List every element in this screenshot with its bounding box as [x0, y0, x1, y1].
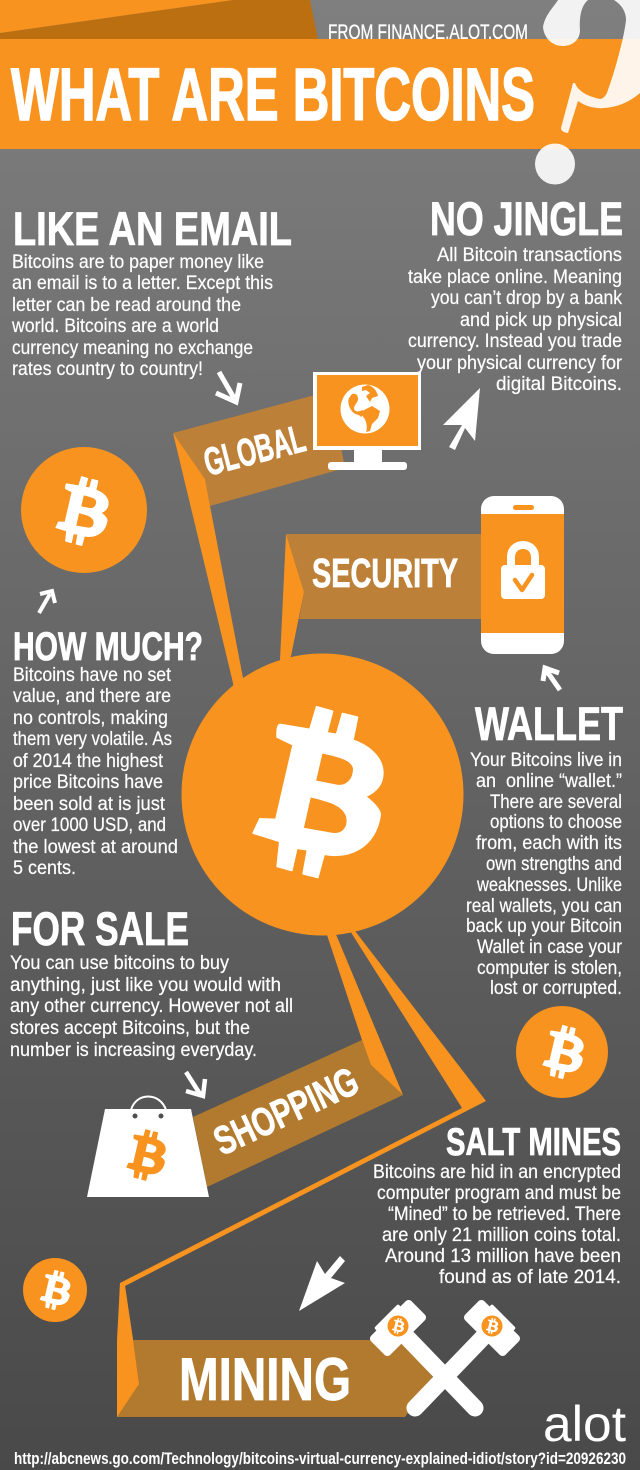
text: how much: price Bitcoins have	[13, 771, 163, 793]
title band	[0, 39, 640, 149]
text: how much: of 2014 the highest	[13, 750, 164, 772]
text: for sale: You can use bitcoins to buy	[10, 952, 229, 974]
text: salt mines: Around 13 million have been	[385, 1245, 621, 1267]
ribbon: shopping and mining connector	[117, 915, 486, 1417]
icon: padlock	[501, 545, 545, 599]
label: shopping: SHOPPING	[207, 1059, 365, 1164]
text: no jingle: you can’t drop by a bank	[431, 287, 622, 309]
text: for sale: any other currency. However not all	[10, 995, 293, 1017]
text: no jingle: currency. Instead you trade	[408, 330, 622, 352]
text: no jingle: take place online. Meaning	[408, 266, 622, 288]
source label: FROM FINANCE.ALOT.COM	[328, 21, 528, 44]
logo: alot: alot	[543, 1396, 626, 1452]
icon: question mark	[535, 0, 640, 184]
panel: no jingle	[408, 192, 623, 395]
text: no jingle: All Bitcoin transactions	[437, 244, 622, 266]
text: salt mines: found as of late 2014.	[439, 1266, 621, 1288]
text: how much: over 1000 USD, and	[13, 814, 166, 836]
label: security: SECURITY	[312, 550, 458, 596]
text: for sale: stores accept Bitcoins, but the	[10, 1017, 250, 1039]
panel: like an email	[11, 202, 292, 380]
text: no jingle: and pick up physical	[460, 309, 622, 331]
icon: phone	[481, 496, 564, 654]
text: wallet: computer is stolen,	[477, 957, 622, 979]
text: how much: the lowest at around	[13, 836, 178, 858]
text: salt mines: Bitcoins are hid in an encrypted	[373, 1161, 621, 1183]
text: like an email: letter can be read around the	[12, 294, 241, 316]
text: how much: Bitcoins have no set	[13, 664, 172, 686]
text: how much	[13, 664, 178, 879]
text: wallet: Wallet in case your	[477, 936, 622, 958]
text: wallet: an online “wallet.”	[476, 770, 622, 792]
heading: for sale: FOR SALE	[11, 902, 189, 955]
text: wallet: lost or corrupted.	[490, 977, 622, 999]
text: wallet: real wallets, you can	[466, 895, 622, 917]
arrow: to phone	[543, 668, 560, 690]
text: wallet: from, each with its	[476, 832, 622, 854]
text: wallet: There are several	[490, 791, 622, 813]
text: for sale: anything, just like you would with	[10, 974, 281, 996]
icon: shopping bag	[87, 1096, 209, 1197]
label: global: GLOBAL	[199, 417, 310, 485]
text: like an email: rates country to country!	[12, 358, 203, 380]
heading: like an email: LIKE AN EMAIL	[13, 202, 292, 255]
text: like an email: an email is to a letter. Except this	[12, 272, 273, 294]
text: wallet: Your Bitcoins live in	[470, 749, 622, 771]
arrow: to global	[216, 372, 240, 402]
text: salt mines	[373, 1161, 621, 1288]
text: no jingle: digital Bitcoins.	[496, 373, 622, 395]
text: no jingle	[408, 244, 622, 395]
text: wallet	[466, 749, 622, 999]
header top shapes	[0, 0, 318, 40]
text: wallet: back up your Bitcoin	[466, 915, 622, 937]
icon: bitcoin coin left	[21, 447, 147, 573]
text: like an email	[11, 251, 273, 380]
ribbon: mining	[117, 1283, 433, 1417]
arrow: to mining	[299, 1256, 345, 1311]
text: salt mines: “Mined” to be retrieved. There	[388, 1203, 621, 1225]
main bitcoin coin	[182, 654, 464, 936]
text: wallet: options to choose	[490, 811, 622, 833]
text: for sale	[10, 952, 293, 1061]
panel: for sale	[10, 902, 293, 1061]
text: how much: value, and there are	[13, 685, 171, 707]
ribbon: global	[173, 391, 345, 700]
ribbon: shopping	[193, 920, 403, 1187]
text: like an email: currency meaning no exchange	[12, 337, 253, 359]
text: salt mines: are only 21 million coins total.	[382, 1224, 621, 1246]
icon: bitcoin coin bottom left	[23, 1258, 87, 1322]
icon: monitor	[313, 372, 421, 470]
heading: how much: HOW MUCH?	[13, 625, 203, 669]
icon: crossed hammers	[366, 1296, 524, 1408]
text: for sale: number is increasing everyday.	[10, 1039, 257, 1061]
panel: wallet	[466, 697, 623, 999]
arrow: cursor	[443, 388, 480, 450]
text: like an email: world. Bitcoins are a world	[11, 315, 219, 337]
text: how much: them very volatile. As	[13, 728, 172, 750]
arrow: to coin	[39, 591, 55, 613]
arrow: to bag	[186, 1072, 205, 1096]
text: like an email: Bitcoins are to paper money like	[12, 251, 264, 273]
panel: how much	[13, 625, 203, 879]
label: mining: MINING	[179, 1346, 351, 1413]
text: how much: 5 cents.	[13, 857, 76, 879]
icon: bitcoin coin right	[516, 1006, 608, 1098]
text: no jingle: your physical currency for	[417, 352, 622, 374]
text: how much: no controls, making	[13, 707, 168, 729]
text: how much: been sold at is just	[13, 793, 166, 815]
panel: salt mines	[373, 1121, 621, 1288]
ribbon: security	[280, 534, 481, 670]
